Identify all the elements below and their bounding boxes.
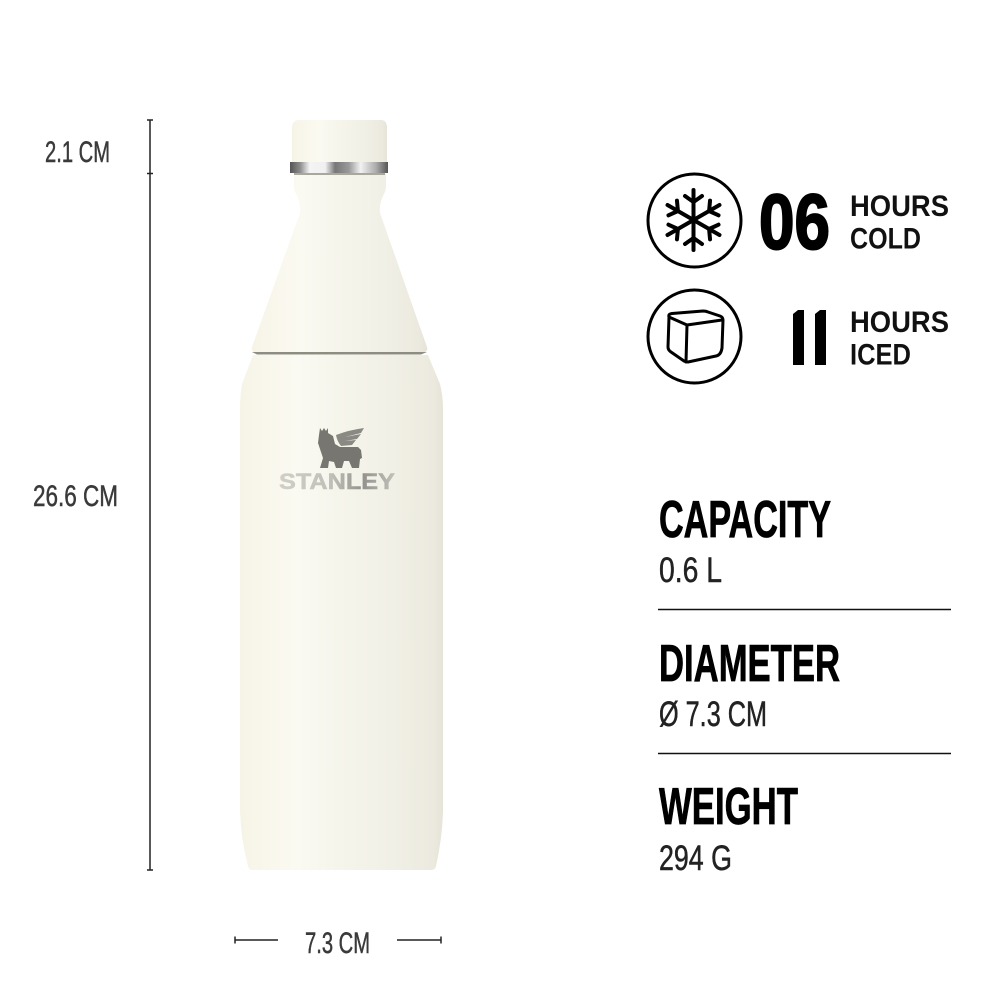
logo wing [336, 428, 364, 446]
icon: snowflake [648, 174, 741, 267]
spec: capacity [659, 491, 831, 590]
spec: diameter: DIAMETER [659, 635, 840, 693]
shoulder shadow line [252, 352, 427, 354]
stat: 06: 06 [759, 178, 830, 266]
spec: weight: 294 G [659, 839, 732, 878]
dimension: width lines [235, 936, 441, 944]
logo [279, 428, 395, 494]
bottle body [240, 355, 443, 870]
stat label: hours iced: ICED [850, 338, 911, 372]
logo wordmark: STANLEY [279, 469, 395, 494]
stat label: hours iced [850, 306, 949, 372]
spec: capacity: 0.6 L [659, 551, 722, 590]
stat label: hours iced: HOURS [850, 306, 949, 339]
spec: diameter [659, 635, 840, 734]
bottle cap [292, 120, 387, 162]
stat label: hours cold [850, 190, 949, 256]
icon: ice cube [648, 290, 741, 383]
bottle shoulder [252, 174, 427, 352]
label: width: 7.3 CM [305, 927, 370, 960]
bottle [240, 120, 443, 870]
metal ring [290, 162, 388, 173]
spec: capacity: CAPACITY [659, 491, 831, 549]
stat: 11 [793, 310, 826, 365]
label: body height: 26.6 CM [33, 480, 118, 513]
spec: weight [659, 778, 798, 878]
dimension: vertical line [147, 120, 153, 870]
stat label: hours cold: HOURS [850, 190, 949, 223]
spec: diameter: Ø 7.3 CM [659, 695, 767, 734]
label: cap height: 2.1 CM [45, 136, 110, 169]
logo bear [318, 428, 362, 468]
stat label: hours cold: COLD [850, 222, 921, 256]
spec: weight: WEIGHT [659, 778, 798, 836]
ring shadow [294, 173, 385, 175]
